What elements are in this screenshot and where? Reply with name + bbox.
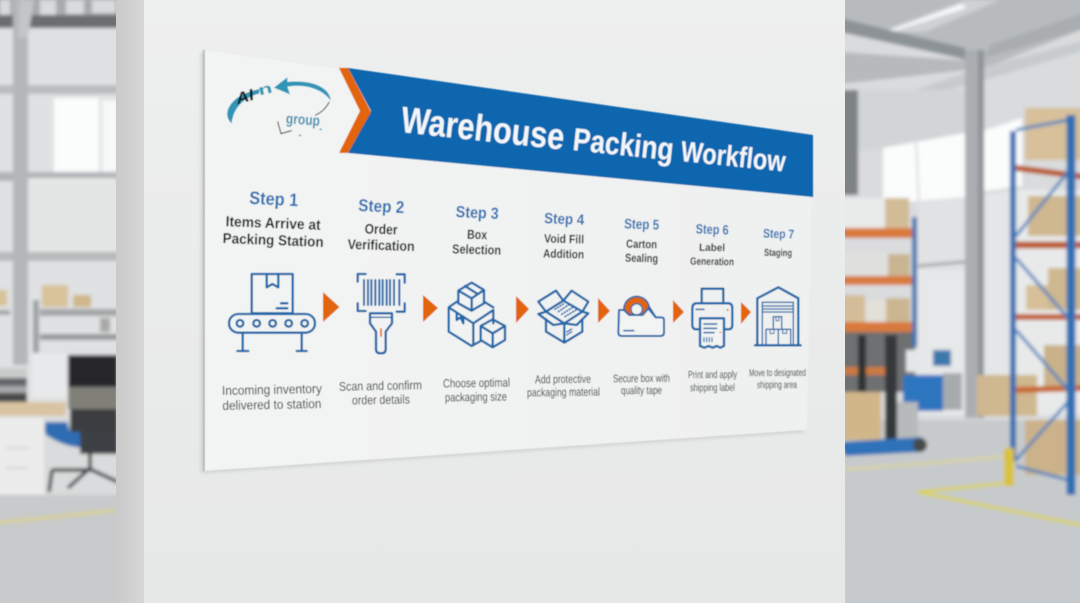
title: Packing (571, 121, 675, 168)
step 6: shipping label (690, 382, 735, 394)
title banner (339, 68, 813, 197)
step 5: quality tape (621, 385, 662, 397)
arrow 6 (741, 302, 751, 324)
logo (227, 77, 331, 136)
step 2: Step 2 (358, 196, 405, 217)
step 5: Carton (626, 239, 657, 251)
step 6: Label (699, 242, 725, 254)
step 3: packaging size (445, 390, 507, 404)
logo: AI (233, 87, 257, 108)
step 3: Choose optimal (443, 375, 510, 391)
icon: tape dispenser (618, 296, 664, 336)
arrow 3 (516, 296, 529, 323)
banner chevron (339, 68, 371, 153)
icon: open box with void fill (538, 291, 588, 343)
step 1: Step 1 (249, 188, 299, 210)
arrow 4 (598, 298, 610, 323)
logo: n (257, 81, 274, 99)
step 4: Void Fill (544, 232, 584, 246)
icon: label printer (692, 289, 732, 348)
step 2: order details (352, 392, 410, 408)
step 2: Scan and confirm (339, 378, 422, 394)
step 5 (613, 215, 670, 397)
icon: conveyor (229, 274, 315, 351)
step 4: Add protective (535, 374, 591, 386)
step 4 (527, 210, 600, 399)
arrow 2 (423, 295, 438, 322)
background: office area left (0, 0, 120, 603)
arrow 1 (323, 292, 340, 322)
logo: group (285, 111, 320, 130)
step 2: Verification (347, 236, 415, 254)
step 4: packaging material (527, 387, 600, 399)
step 1 (222, 188, 324, 413)
step 7: Staging (764, 248, 792, 259)
step 5: Sealing (625, 253, 658, 265)
step 2: Order (364, 220, 398, 238)
step 3: Selection (452, 241, 501, 258)
wall pillar (116, 0, 845, 603)
arrow 5 (673, 300, 684, 323)
step 3: Step 3 (455, 204, 499, 223)
step 3 (443, 204, 510, 404)
title: Warehouse (399, 99, 567, 158)
step 4: Step 4 (544, 210, 585, 229)
step 1: Incoming inventory (222, 381, 322, 398)
step 6: Print and apply (688, 369, 738, 381)
step 6: Generation (690, 256, 734, 268)
sign shadow (201, 52, 810, 473)
step 1: Packing Station (222, 231, 324, 251)
step 6 (688, 221, 738, 394)
step 3: Box (467, 227, 488, 242)
icon: stacked boxes (449, 283, 505, 347)
background: warehouse right (840, 0, 1080, 603)
step 5: Step 5 (624, 215, 660, 233)
step 7: shipping area (757, 380, 797, 391)
step 1: delivered to station (222, 396, 322, 413)
step 2 (339, 196, 422, 408)
icon: warehouse staging (755, 287, 801, 345)
step 7 (749, 227, 806, 391)
step 5: Secure box with (613, 373, 670, 385)
step 6: Step 6 (695, 221, 729, 238)
step 1: Items Arrive at (225, 214, 321, 234)
step 4: Addition (543, 247, 584, 261)
title (399, 99, 787, 179)
step 7: Step 7 (763, 227, 794, 241)
sign board (204, 50, 813, 471)
step 7: Move to designated (749, 368, 806, 379)
title: Workflow (679, 136, 787, 179)
icon: barcode scanner (358, 274, 405, 353)
